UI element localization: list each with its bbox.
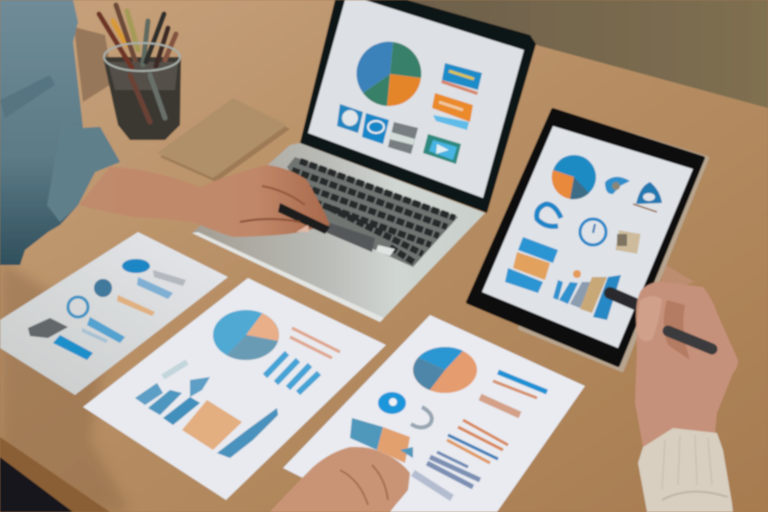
tan notebook [157, 98, 290, 182]
bottom hand [270, 447, 410, 512]
stylus [668, 331, 712, 349]
tablet [468, 110, 707, 370]
laptop display [308, 0, 524, 198]
stylus tip on tablet [610, 293, 640, 306]
pencil cup [99, 5, 181, 140]
paper center [83, 278, 386, 500]
paper center pie [213, 310, 279, 360]
laptop screen frame [300, 0, 536, 213]
laptop icons row [337, 104, 461, 164]
tablet frame [468, 110, 703, 365]
tablet icons [537, 177, 662, 254]
tablet display [482, 126, 693, 348]
laptop pie chart [357, 42, 421, 106]
keyboard [276, 157, 458, 267]
forearm behind tablet [660, 264, 695, 292]
tablet blue and orange blocks [505, 237, 558, 293]
tablet pie [552, 155, 596, 199]
laptop orange card [432, 93, 473, 130]
laptop [192, 0, 536, 322]
background wall [405, 0, 768, 108]
laptop base [192, 143, 485, 322]
left arm and hand [80, 165, 330, 237]
paper right [283, 315, 585, 512]
person shirt [0, 0, 120, 265]
laptop blue card [441, 63, 482, 95]
tablet edge [520, 125, 707, 370]
tablet bar icons [553, 270, 621, 320]
back left gap [74, 27, 113, 102]
paper left [0, 232, 228, 395]
right hand [635, 282, 738, 447]
sweater cuff [638, 428, 733, 512]
paper right pie [413, 347, 477, 393]
